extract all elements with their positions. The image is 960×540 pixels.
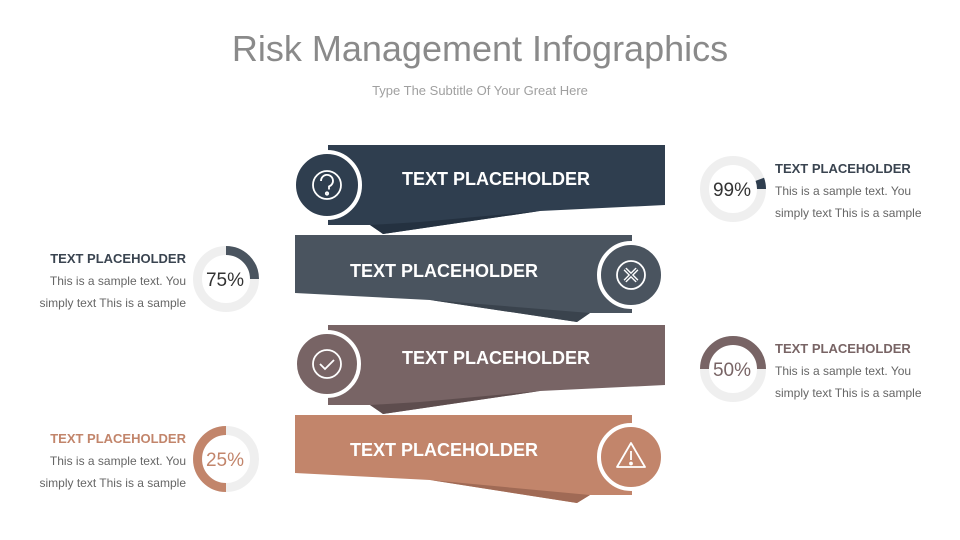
icon: question	[313, 171, 341, 199]
text block right 1: TEXT PLACEHOLDER	[775, 161, 911, 176]
donut 25	[198, 430, 254, 488]
donut 75: 75%	[206, 270, 244, 291]
donut 25: 25%	[206, 450, 244, 471]
banner 3	[295, 325, 665, 414]
banner 1	[294, 145, 665, 234]
donut 99: 99%	[713, 180, 751, 201]
icon: check	[313, 350, 341, 378]
banner 2	[295, 235, 663, 322]
text block right 1: simply text This is a sample	[775, 206, 922, 220]
text block left 2	[40, 431, 186, 490]
banner 3: TEXT PLACEHOLDER	[402, 348, 590, 368]
text block left 1: TEXT PLACEHOLDER	[50, 251, 186, 266]
icon: warning	[617, 443, 645, 467]
donut 50	[704, 340, 762, 398]
title: Risk Management Infographics	[232, 28, 728, 69]
donut 99	[704, 160, 762, 218]
text block right 2	[775, 341, 922, 400]
text block left 2: simply text This is a sample	[40, 476, 186, 490]
text block left 2: TEXT PLACEHOLDER	[50, 431, 186, 446]
text block left 2: This is a sample text. You	[50, 454, 186, 468]
text block right 2: simply text This is a sample	[775, 386, 922, 400]
banner 2: TEXT PLACEHOLDER	[350, 261, 538, 281]
banner 4: TEXT PLACEHOLDER	[350, 440, 538, 460]
donut 50: 50%	[713, 360, 751, 381]
subtitle: Type The Subtitle Of Your Great Here	[372, 83, 588, 98]
text block left 1	[40, 251, 186, 310]
text block right 2: This is a sample text. You	[775, 364, 911, 378]
text block right 2: TEXT PLACEHOLDER	[775, 341, 911, 356]
text block left 1: simply text This is a sample	[40, 296, 186, 310]
donut 75	[198, 250, 254, 308]
text block right 1: This is a sample text. You	[775, 184, 911, 198]
text block right 1	[775, 161, 922, 220]
icon: cross	[617, 261, 645, 289]
banner 4	[295, 415, 663, 503]
banner 1: TEXT PLACEHOLDER	[402, 169, 590, 189]
text block left 1: This is a sample text. You	[50, 274, 186, 288]
